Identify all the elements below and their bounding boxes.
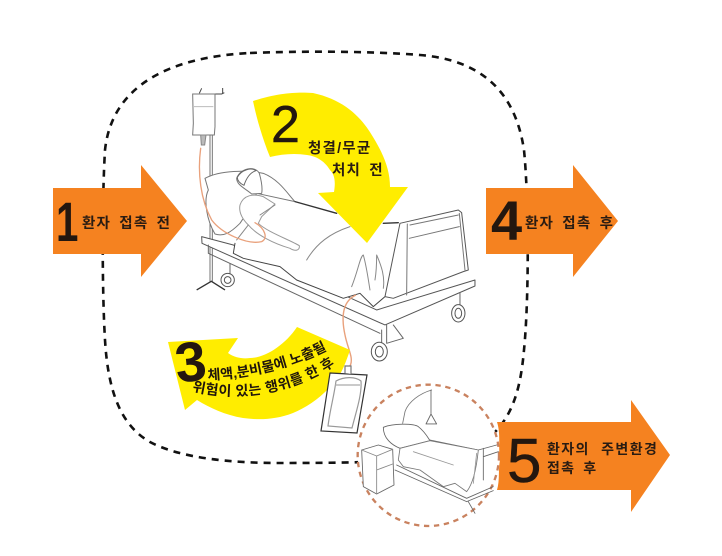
arrow 3: yellow curved arrow (168, 327, 350, 420)
number 1: 1 (56, 192, 78, 254)
blanket (233, 202, 397, 307)
small bed (362, 390, 498, 513)
bed frame (202, 237, 475, 325)
pillow (205, 171, 295, 235)
arrow 3: yellow curved arrow: 체액,분비물에 노출될 (208, 340, 326, 381)
number 4: 4 (491, 189, 522, 252)
IV pole and bag (193, 88, 225, 290)
arrow 2: yellow curved arrow: 처치 전 (332, 162, 384, 179)
drainage tube (343, 295, 356, 366)
number 2: 2 (271, 96, 300, 154)
IV tube (199, 148, 265, 242)
label 3 (208, 340, 345, 380)
label 4: 환자 접촉 후 (525, 215, 614, 232)
arrow 1 (53, 165, 187, 277)
arrow 5: 접촉 후 (547, 460, 597, 476)
footboard (385, 210, 468, 298)
patient arm and gown (240, 195, 299, 250)
arrow 3: yellow curved arrow: 위험이 있는 행위를 한 후 (193, 356, 334, 397)
dashed patient zone boundary (103, 52, 528, 463)
number 5: 5 (507, 427, 541, 496)
number 3: 3 (172, 329, 209, 395)
arrow 5 (497, 400, 670, 512)
drainage bag (321, 366, 367, 433)
arrow 2: yellow curved arrow (253, 93, 408, 243)
label 1: 환자 접촉 전 (82, 215, 171, 232)
patient head (237, 169, 262, 194)
arrow 4 (486, 165, 618, 277)
label 5: 환자의 주변환경 (547, 441, 658, 457)
wheels (221, 273, 234, 287)
hospital bed with patient (199, 148, 475, 361)
patient surroundings circle (358, 385, 499, 526)
label 2: 청결/무균 (308, 140, 371, 157)
